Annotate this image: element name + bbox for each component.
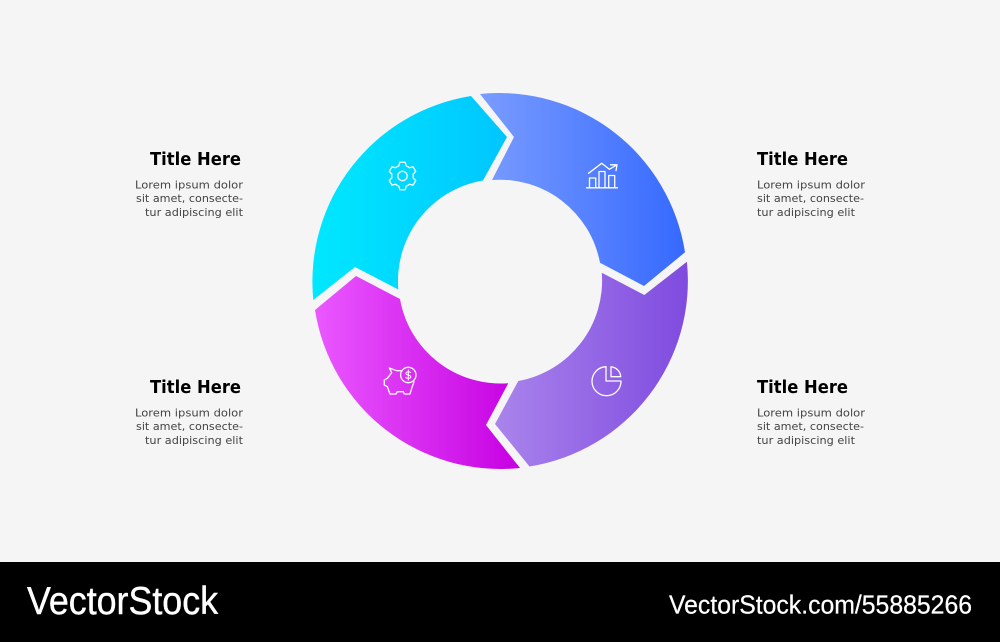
segment: purple arrow	[495, 262, 688, 466]
footer image id: VectorStock.com/55885266	[669, 590, 972, 620]
description: sit amet, consecte-	[136, 420, 243, 433]
footer bar	[0, 562, 1000, 642]
circular arrow diagram	[312, 93, 688, 469]
icon: gear	[387, 162, 418, 190]
description	[135, 178, 244, 219]
icon: piggy bank	[384, 367, 416, 394]
segment: cyan arrow	[312, 96, 507, 300]
text block: bottom left	[135, 378, 244, 447]
heading: Title Here	[757, 150, 848, 170]
icon: growth chart	[586, 163, 618, 188]
footer logo text: VectorStock	[27, 580, 218, 623]
icon: pie chart	[592, 367, 621, 396]
description: tur adipiscing elit	[145, 206, 244, 219]
heading: Title Here	[150, 378, 241, 398]
segment: magenta arrow	[315, 276, 520, 469]
description: sit amet, consecte-	[757, 192, 864, 205]
heading: Title Here	[757, 378, 848, 398]
description: Lorem ipsum dolor	[757, 406, 865, 419]
description: tur adipiscing elit	[145, 434, 244, 447]
text block: top left	[135, 150, 244, 219]
description: tur adipiscing elit	[757, 434, 856, 447]
description: tur adipiscing elit	[757, 206, 856, 219]
text block: top right	[757, 150, 865, 219]
description: sit amet, consecte-	[136, 192, 243, 205]
segment: blue arrow	[480, 93, 685, 286]
description	[757, 178, 865, 219]
description	[135, 406, 244, 447]
description	[757, 406, 865, 447]
description: sit amet, consecte-	[757, 420, 864, 433]
description: Lorem ipsum dolor	[757, 178, 865, 191]
heading: Title Here	[150, 150, 241, 170]
text block: bottom right	[757, 378, 865, 447]
description: Lorem ipsum dolor	[135, 178, 243, 191]
description: Lorem ipsum dolor	[135, 406, 243, 419]
